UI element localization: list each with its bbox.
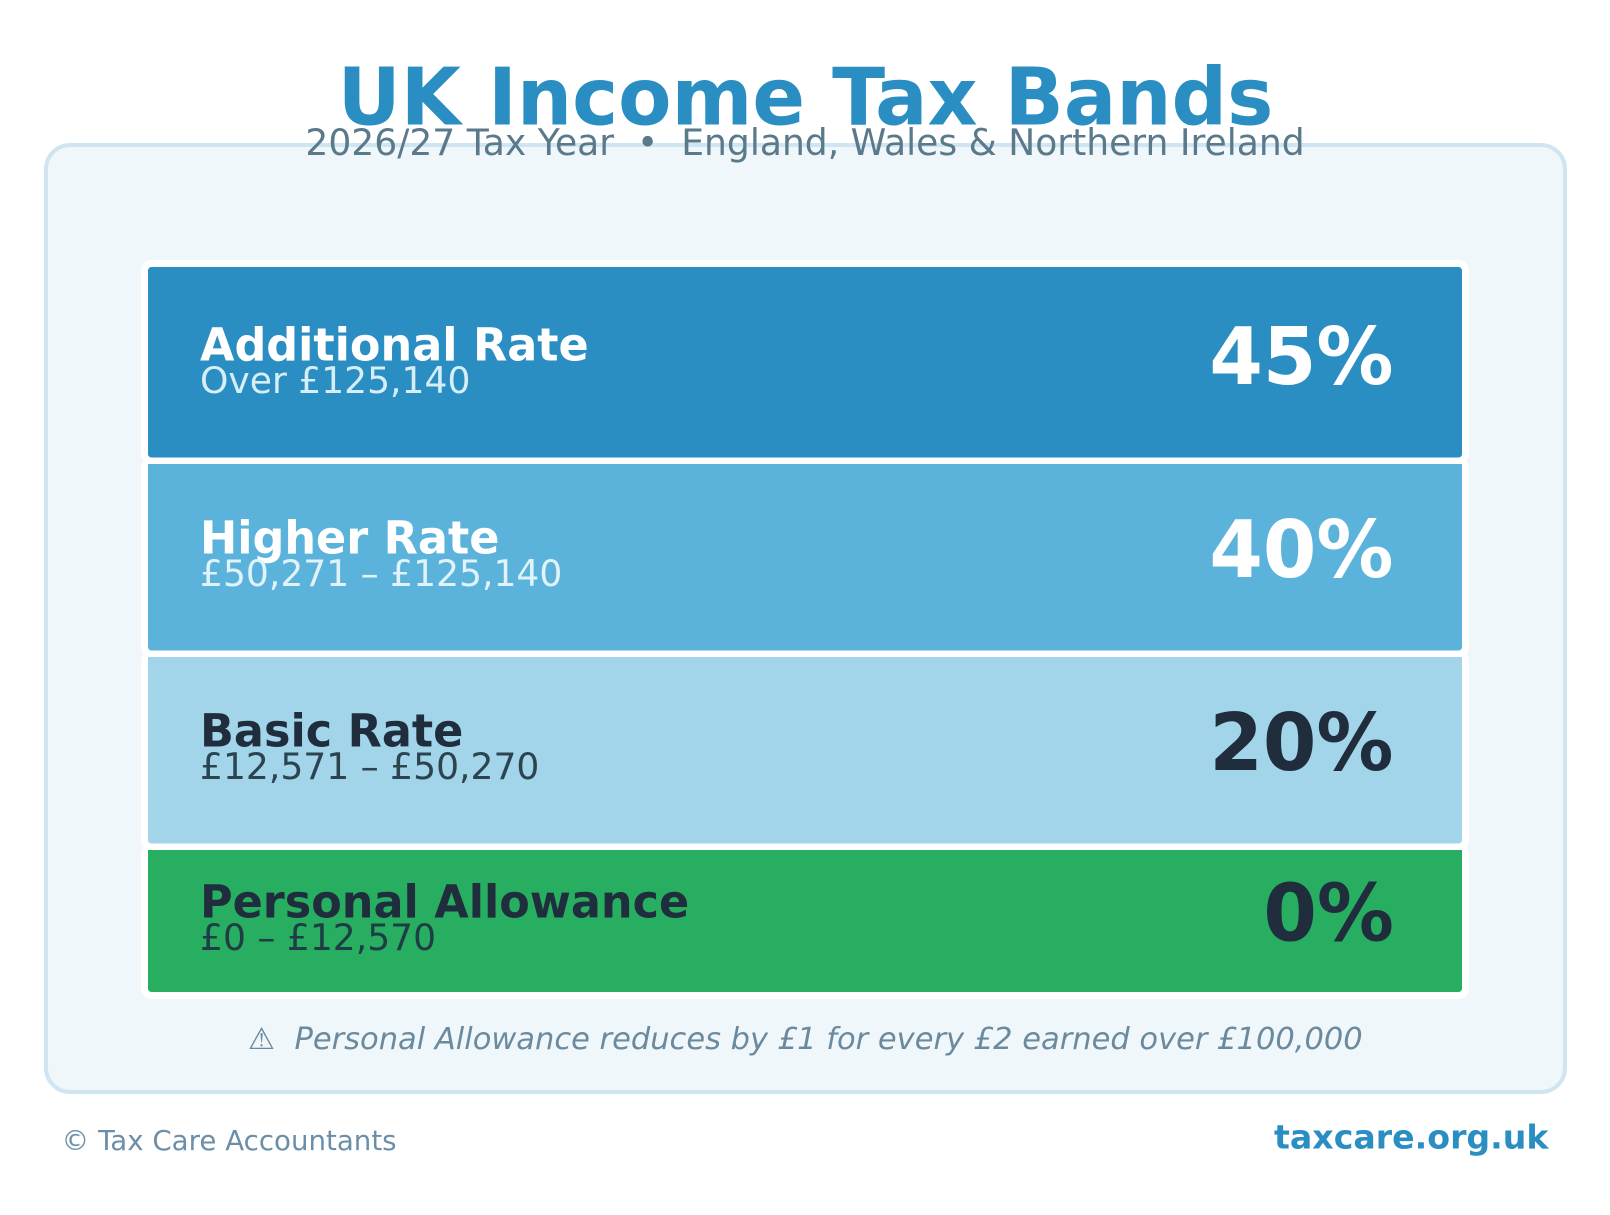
band name: basic rate: Basic Rate bbox=[200, 704, 463, 758]
band range: basic rate: £12,571 – £50,270 bbox=[200, 746, 539, 788]
band: additional rate bbox=[144, 264, 1466, 461]
rate: 40%: 40% bbox=[1209, 504, 1394, 596]
band name: additional rate: Additional Rate bbox=[200, 318, 589, 372]
band range: additional rate: Over £125,140 bbox=[200, 360, 470, 402]
band: higher rate bbox=[144, 461, 1466, 654]
band: personal allowance bbox=[144, 847, 1466, 996]
footer: copyright: © Tax Care Accountants bbox=[62, 1124, 397, 1157]
band range: personal allowance: £0 – £12,570 bbox=[200, 917, 436, 959]
panel: main card bbox=[46, 145, 1565, 1092]
panel: tax band stack bbox=[144, 264, 1466, 996]
footnote with warning icon: ⚠ Personal Allowance reduces by £1 for every £2 earned over £100,000 bbox=[248, 1022, 1363, 1057]
band range: higher rate: £50,271 – £125,140 bbox=[200, 553, 562, 595]
band name: personal allowance: Personal Allowance bbox=[200, 875, 689, 929]
rate: 0%: 0% bbox=[1263, 867, 1394, 960]
footer: website: taxcare.org.uk bbox=[1274, 1118, 1549, 1156]
rate: 20%: 20% bbox=[1209, 697, 1394, 789]
band: basic rate bbox=[144, 654, 1466, 847]
title: UK Income Tax Bands bbox=[338, 51, 1273, 144]
rate: 45%: 45% bbox=[1209, 311, 1394, 403]
band name: higher rate: Higher Rate bbox=[200, 511, 499, 565]
subtitle: 2026/27 Tax Year • England, Wales & Northern Ireland bbox=[305, 122, 1305, 164]
